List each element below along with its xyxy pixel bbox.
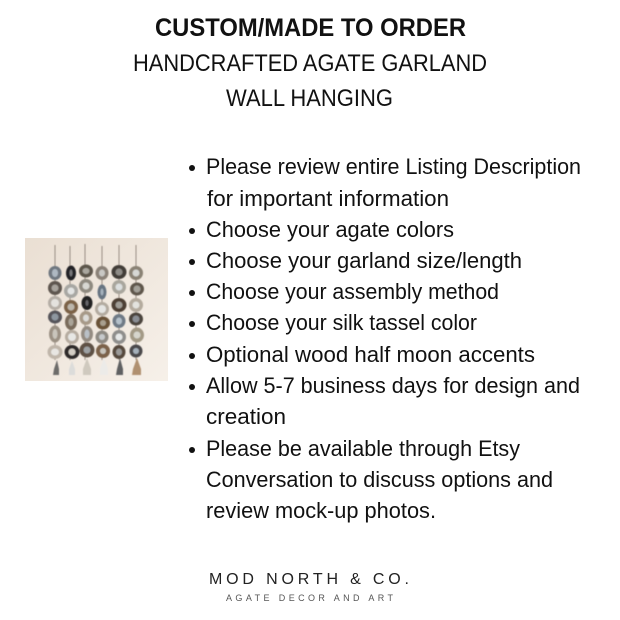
- product photo: agate garland wall hanging: [25, 238, 168, 381]
- bullet: etsy conversation: [189, 436, 553, 523]
- title: [133, 14, 487, 112]
- bullet: review listing: [189, 154, 581, 211]
- bullet: garland size: Choose your garland size/length: [206, 248, 522, 273]
- garland strand 5: [112, 245, 126, 375]
- footer logo: [209, 571, 409, 603]
- brand name: MOD NORTH & CO.: [209, 571, 409, 588]
- bullet: etsy conversation: Conversation to discuss options and: [206, 467, 553, 492]
- subheading: wall hanging: WALL HANGING: [226, 85, 393, 112]
- garland strand 1: [48, 245, 62, 375]
- garland strand 4: [95, 246, 110, 375]
- bullet: assembly method: Choose your assembly method: [206, 279, 499, 304]
- bullet: wood accents: Optional wood half moon accents: [206, 342, 535, 367]
- subheading: product name: HANDCRAFTED AGATE GARLAND: [133, 50, 487, 77]
- bullet: review listing: for important information: [207, 186, 449, 211]
- garland strand 6: [129, 245, 144, 375]
- bullet: tassel color: Choose your silk tassel color: [206, 310, 477, 335]
- bullet: lead time: Allow 5-7 business days for design and: [206, 373, 580, 398]
- bullet list: [189, 154, 581, 523]
- garland strand 3: [79, 244, 94, 375]
- bullet: agate colors: Choose your agate colors: [206, 217, 454, 242]
- heading: custom made to order: CUSTOM/MADE TO ORDER: [155, 14, 466, 42]
- brand tagline: AGATE DECOR AND ART: [226, 593, 394, 603]
- bullet: lead time: creation: [206, 404, 286, 429]
- bullet: lead time: [189, 373, 580, 429]
- bullet: etsy conversation: review mock-up photos.: [206, 498, 436, 523]
- garland strand 2: [64, 246, 80, 375]
- bullet: etsy conversation: Please be available through Etsy: [206, 436, 520, 461]
- bullet: review listing: Please review entire Listing Description: [206, 154, 581, 179]
